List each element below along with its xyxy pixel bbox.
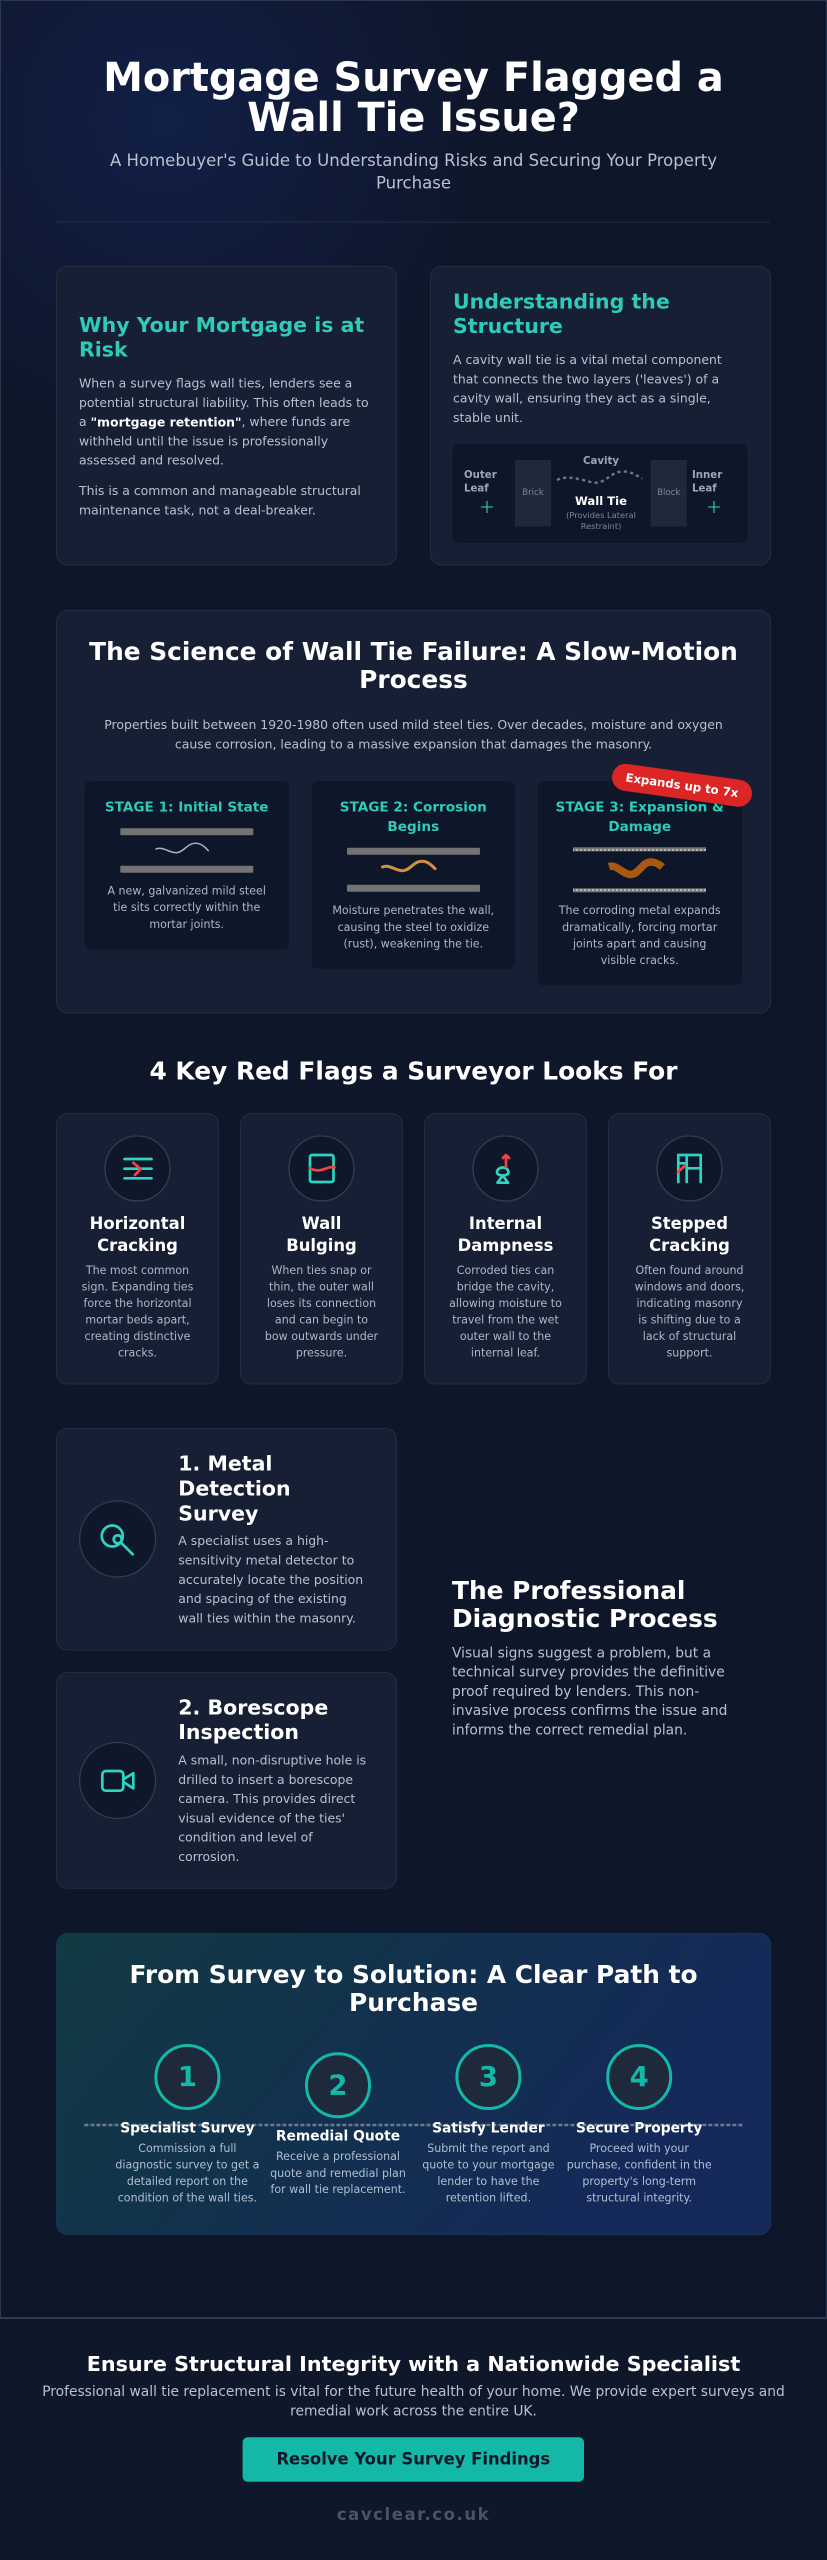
- card: metal detection survey: wall ties within the masonry.: [178, 1610, 356, 1625]
- icon: horizontal cracking: [105, 1136, 170, 1201]
- text block: professional diagnostic process: proof required by lenders. This non-: [452, 1684, 699, 1700]
- step 4: 4: [630, 2061, 649, 2093]
- subtitle: [110, 151, 717, 192]
- card: borescope inspection: A small, non-disruptive hole is: [178, 1752, 366, 1768]
- brick leaf: Brick: [522, 488, 544, 498]
- step 2: [270, 2054, 406, 2196]
- stage 3: Damage: [608, 819, 671, 835]
- step 2: 2: [328, 2069, 348, 2101]
- step 3: Satisfy Lender: [432, 2120, 545, 2136]
- heading: 4 key red flags: 4 Key Red Flags a Surveyor Looks For: [150, 1056, 678, 1086]
- card: wall bulging: Wall: [302, 1214, 341, 1233]
- diagram: intact tie: [120, 828, 253, 873]
- card: horizontal cracking: mortar beds apart,: [85, 1313, 190, 1326]
- stage 1: tie sits correctly within the: [113, 901, 260, 914]
- text block: cavity wall tie: cavity wall, ensuring they act as a single,: [453, 391, 711, 406]
- card: metal detection survey: Detection: [178, 1476, 291, 1500]
- step 1: condition of the wall ties.: [118, 2192, 257, 2204]
- label: wall tie: Wall Tie: [575, 494, 627, 508]
- step 4: purchase, confident in the: [567, 2158, 712, 2172]
- step 3: lender to have the: [437, 2175, 540, 2188]
- stage 3: [538, 781, 742, 985]
- step 2: Receive a professional: [276, 2150, 400, 2163]
- text block: cavity wall tie: A cavity wall tie is a vital metal component: [453, 352, 722, 367]
- panel: why your mortgage is at risk: [56, 266, 396, 565]
- text block: professional diagnostic process: [452, 1576, 727, 1738]
- stage 2: Moisture penetrates the wall,: [332, 904, 494, 917]
- text block: mortgage retention: a "mortgage retention", where funds are: [79, 414, 350, 429]
- stage 1: mortar joints.: [149, 918, 224, 931]
- step 4: structural integrity.: [586, 2192, 692, 2204]
- text block: mortgage retention: assessed and resolved.: [79, 453, 224, 468]
- text block: manageable task: This is a common and manageable structural: [78, 483, 361, 498]
- stage 1: A new, galvanized mild steel: [107, 884, 266, 898]
- card: metal detection survey: accurately locate the position: [178, 1572, 363, 1587]
- card: internal dampness: bridge the cavity,: [457, 1280, 554, 1293]
- text block: manageable task: maintenance task, not a deal-breaker.: [79, 502, 316, 517]
- card: metal detection survey: [56, 1428, 396, 1650]
- card: borescope inspection: camera. This provides direct: [178, 1791, 355, 1806]
- card: horizontal cracking: Horizontal: [90, 1214, 185, 1233]
- stage 3: visible cracks.: [601, 954, 679, 967]
- text block: professional diagnostic process: The Professional: [452, 1576, 685, 1605]
- card: internal dampness: Internal: [469, 1214, 542, 1233]
- step 3: retention lifted.: [446, 2192, 531, 2204]
- footer text: Professional wall tie replacement is vital for the future health of your home. We provide expert surveys and: [42, 2384, 785, 2400]
- card: wall bulging: pressure.: [296, 1346, 347, 1360]
- heading: science of wall tie failure: The Science of Wall Tie Failure: A Slow-Motion: [89, 637, 738, 666]
- label: wall tie: Restraint): [581, 521, 621, 531]
- step 1: detailed report on the: [127, 2175, 248, 2188]
- step 3: Submit the report and: [427, 2142, 550, 2155]
- icon: magnifier: [80, 1501, 156, 1577]
- card: wall bulging: bow outwards under: [265, 1330, 379, 1343]
- card: internal dampness: allowing moisture to: [449, 1297, 562, 1310]
- card: metal detection survey: sensitivity metal detector to: [178, 1552, 354, 1568]
- card: horizontal cracking: Cracking: [97, 1236, 178, 1255]
- panel: understanding the structure: [430, 266, 770, 565]
- card: horizontal cracking: [56, 1114, 218, 1384]
- icon: camera: [80, 1742, 156, 1818]
- step 4: [567, 2046, 712, 2204]
- stage 3: dramatically, forcing mortar: [562, 921, 718, 934]
- callout: expands up to 7x: Expands up to 7x: [625, 770, 740, 800]
- label: inner leaf: [692, 470, 722, 513]
- stage 3: joints apart and causing: [572, 938, 706, 950]
- footer: [0, 2317, 827, 2560]
- heading: understanding the structure: [453, 290, 670, 338]
- stage 2: Begins: [387, 819, 439, 835]
- step 1: [115, 2046, 259, 2204]
- card: wall bulging: When ties snap or: [271, 1264, 372, 1277]
- text block: cavity wall tie: stable unit.: [453, 410, 523, 425]
- card: stepped cracking: Stepped: [651, 1214, 728, 1233]
- step 2: Remedial Quote: [276, 2129, 400, 2145]
- block leaf: [651, 460, 687, 526]
- card: horizontal cracking: force the horizontal: [83, 1297, 192, 1310]
- card: stepped cracking: support.: [667, 1346, 712, 1360]
- stage 2: (rust), weakening the tie.: [343, 938, 483, 950]
- title: Wall Tie Issue?: [247, 95, 580, 141]
- card: internal dampness: Corroded ties can: [457, 1264, 554, 1277]
- step 3: quote to your mortgage: [422, 2158, 555, 2172]
- heading: from survey to solution: [129, 1960, 698, 2017]
- text block: mortgage retention: potential structural liability. This often leads to: [79, 395, 369, 410]
- block leaf: Block: [657, 488, 680, 498]
- text block: manageable task: [78, 483, 361, 517]
- heading: why your mortgage is at risk: Risk: [79, 338, 129, 362]
- step 2: for wall tie replacement.: [270, 2183, 406, 2196]
- label: cavity: Cavity: [583, 456, 619, 467]
- stage 2: STAGE 2: Corrosion: [340, 800, 487, 816]
- label: outer leaf: [464, 470, 497, 513]
- card: stepped cracking: Often found around: [635, 1264, 744, 1277]
- text block: mortgage retention: [79, 376, 369, 468]
- text block: cavity wall tie: [453, 352, 722, 425]
- card: metal detection survey: 1. Metal: [178, 1451, 272, 1475]
- step 2: quote and remedial plan: [270, 2167, 406, 2180]
- card: metal detection survey: Survey: [178, 1501, 258, 1525]
- card: borescope inspection: condition and level of: [178, 1830, 313, 1845]
- stage 1: [84, 781, 289, 950]
- brand: cavclear.co.uk: cavclear.co.uk: [337, 2505, 490, 2524]
- title: Mortgage Survey Flagged a: [103, 55, 724, 101]
- callout: expands up to 7x: [610, 762, 754, 808]
- card: wall bulging: and can begin to: [275, 1313, 368, 1326]
- text block: professional diagnostic process: invasive process confirms the issue and: [452, 1703, 727, 1719]
- diagram: expanded tie: [573, 847, 706, 892]
- card: stepped cracking: is shifting due to a: [638, 1313, 741, 1326]
- step 4: Proceed with your: [589, 2142, 689, 2155]
- card: borescope inspection: [56, 1672, 396, 1888]
- text block: corrosion intro: [104, 717, 723, 752]
- button: resolve your survey findings: Resolve Your Survey Findings: [276, 2450, 550, 2468]
- timeline line: [84, 2124, 743, 2126]
- card: horizontal cracking: cracks.: [118, 1346, 157, 1360]
- step 1: diagnostic survey to get a: [115, 2158, 259, 2172]
- text block: professional diagnostic process: informs the correct remedial plan.: [452, 1722, 687, 1738]
- card: stepped cracking: [608, 1114, 770, 1384]
- heading: science of wall tie failure: [89, 637, 738, 694]
- heading: understanding the structure: Understanding the: [453, 290, 670, 314]
- heading: why your mortgage is at risk: [79, 313, 364, 362]
- card: borescope inspection: drilled to insert a borescope: [178, 1772, 353, 1787]
- panel: science of wall tie failure: [56, 610, 770, 1013]
- icon: internal dampness: [473, 1136, 538, 1201]
- card: horizontal cracking: The most common: [85, 1264, 189, 1277]
- label: outer leaf: Leaf: [464, 484, 489, 494]
- card: internal dampness: outer wall to the: [460, 1330, 551, 1343]
- heading: why your mortgage is at risk: Why Your Mortgage is at: [79, 313, 364, 337]
- stage 3: STAGE 3: Expansion &: [556, 800, 724, 816]
- heading: science of wall tie failure: Process: [359, 665, 468, 694]
- card: stepped cracking: Cracking: [649, 1236, 730, 1255]
- step 1: Commission a full: [138, 2142, 237, 2155]
- card: internal dampness: travel from the wet: [452, 1313, 559, 1326]
- step 1: Specialist Survey: [120, 2120, 255, 2136]
- card: stepped cracking: windows and doors,: [635, 1280, 744, 1293]
- card: borescope inspection: Inspection: [178, 1720, 299, 1744]
- brick leaf: [515, 460, 551, 526]
- label: wall tie: [566, 494, 636, 531]
- heading: from survey to solution: Purchase: [349, 1988, 478, 2017]
- card: borescope inspection: 2. Borescope: [178, 1695, 328, 1719]
- footer heading: Ensure Structural Integrity with a Nationwide Specialist: [87, 2352, 740, 2376]
- card: metal detection survey: A specialist uses a high-: [178, 1533, 329, 1548]
- label: outer leaf: Outer: [464, 470, 497, 481]
- card: horizontal cracking: creating distinctive: [85, 1330, 191, 1343]
- text block: mortgage retention: When a survey flags wall ties, lenders see a: [79, 376, 352, 390]
- step 4: property's long-term: [582, 2175, 696, 2188]
- icon: stepped cracking: [657, 1136, 722, 1201]
- card: stepped cracking: lack of structural: [643, 1330, 736, 1343]
- stage 3: The corroding metal expands: [558, 904, 721, 917]
- label: wall tie: (Provides Lateral: [566, 510, 636, 520]
- card: borescope inspection: corrosion.: [178, 1849, 239, 1864]
- text block: cavity wall tie: that connects the two layers ('leaves') of a: [453, 371, 719, 386]
- card: wall bulging: thin, the outer wall: [269, 1280, 374, 1293]
- card: internal dampness: Dampness: [458, 1236, 553, 1255]
- diagram: cavity wall cross-section: [452, 444, 748, 543]
- text block: corrosion intro: cause corrosion, leading to a massive expansion that damages the masonry.: [175, 736, 652, 752]
- card: stepped cracking: indicating masonry: [636, 1297, 743, 1310]
- title: [103, 55, 724, 141]
- card: horizontal cracking: sign. Expanding ties: [82, 1280, 194, 1293]
- diagram: corroding tie: [347, 848, 480, 892]
- icon: wall bulging: [289, 1136, 354, 1201]
- label: inner leaf: Leaf: [692, 484, 717, 494]
- stage 1: STAGE 1: Initial State: [105, 800, 269, 816]
- text block: professional diagnostic process: Visual signs suggest a problem, but a: [452, 1645, 711, 1661]
- subtitle: A Homebuyer's Guide to Understanding Risks and Securing Your Property: [110, 151, 717, 170]
- card: wall bulging: Bulging: [286, 1236, 357, 1255]
- wall tie wave: [557, 471, 642, 483]
- card: borescope inspection: visual evidence of the ties': [178, 1810, 345, 1825]
- heading: from survey to solution: From Survey to Solution: A Clear Path to: [129, 1960, 698, 1989]
- text block: mortgage retention: withheld until the issue is professionally: [79, 433, 328, 448]
- text block: professional diagnostic process: technical survey provides the definitive: [452, 1665, 725, 1681]
- label: inner leaf: Inner: [692, 470, 722, 481]
- card: wall bulging: loses its connection: [267, 1297, 376, 1310]
- step 4: Secure Property: [576, 2120, 702, 2136]
- panel: from survey to solution: [56, 1934, 770, 2234]
- heading: understanding the structure: Structure: [453, 314, 563, 338]
- card: internal dampness: internal leaf.: [471, 1346, 540, 1360]
- text block: corrosion intro: Properties built between 1920-1980 often used mild steel ties. Over decades, moisture and oxygen: [104, 717, 723, 732]
- stage 2: causing the steel to oxidize: [338, 921, 489, 934]
- card: metal detection survey: and spacing of the existing: [178, 1591, 347, 1606]
- step 1: 1: [178, 2061, 197, 2093]
- step 3: [422, 2046, 555, 2204]
- step 3: 3: [479, 2061, 498, 2093]
- footer text: remedial work across the entire UK.: [290, 2403, 537, 2419]
- subtitle: Purchase: [376, 174, 451, 192]
- button: resolve your survey findings: [243, 2437, 584, 2482]
- header: [103, 55, 724, 192]
- footer text: [42, 2384, 785, 2419]
- card: wall bulging: [240, 1114, 402, 1384]
- stage 2: [312, 781, 515, 969]
- text block: professional diagnostic process: Diagnostic Process: [452, 1604, 718, 1633]
- card: internal dampness: [424, 1114, 586, 1384]
